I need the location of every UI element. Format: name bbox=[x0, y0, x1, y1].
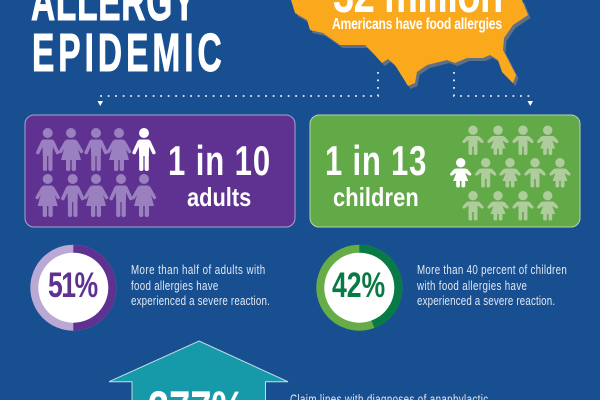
text: adults severe reaction: More than half of adults with bbox=[131, 264, 265, 277]
text: adults severe reaction bbox=[131, 264, 270, 308]
text: children severe reaction: More than 40 percent of children bbox=[417, 264, 567, 277]
icon group: thirteen children, one white bbox=[450, 126, 571, 220]
children ratio: 1 in 13 bbox=[325, 137, 426, 184]
icon group: ten adults, one white bbox=[37, 128, 155, 217]
adults ratio: 1 in 10 bbox=[168, 137, 270, 184]
up arrow with increase statistic bbox=[109, 341, 288, 400]
panel: children bbox=[310, 115, 580, 227]
text: adults severe reaction: food allergies have bbox=[131, 280, 218, 293]
dotted arrow to adults panel bbox=[98, 72, 378, 106]
children label: children bbox=[333, 183, 419, 212]
map caption: Americans have food allergies bbox=[332, 15, 502, 32]
text: children severe reaction: with food allergies have bbox=[416, 280, 527, 293]
map of the United States with headline statistic bbox=[291, 0, 530, 89]
text: children severe reaction bbox=[416, 264, 567, 308]
text: children severe reaction: experienced a severe reaction. bbox=[417, 295, 555, 308]
dotted arrow to children panel bbox=[454, 72, 533, 106]
donut chart: 51% of adults: 51% bbox=[48, 265, 98, 305]
donut chart: 42% of children bbox=[316, 245, 402, 331]
panel: adults bbox=[25, 115, 295, 227]
title: EPIDEMIC bbox=[32, 22, 222, 83]
text: adults severe reaction: experienced a severe reaction. bbox=[131, 295, 270, 308]
adults label: adults bbox=[187, 183, 251, 212]
donut chart: 42% of children: 42% bbox=[332, 265, 385, 305]
donut chart: 51% of adults bbox=[30, 245, 116, 331]
